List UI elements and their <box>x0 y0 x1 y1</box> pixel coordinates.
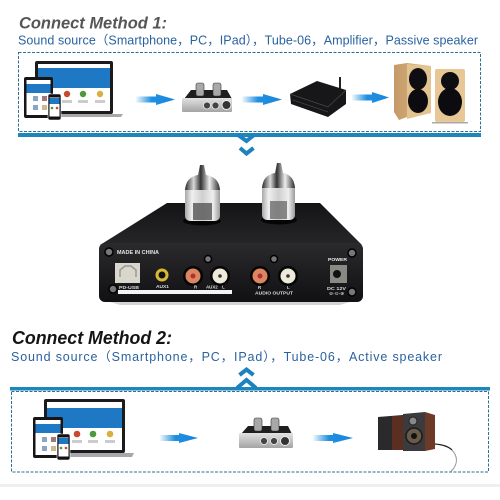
tube right <box>261 163 297 224</box>
port: audio output rca: L <box>287 285 290 290</box>
port: audio output rca: R <box>258 285 262 290</box>
device: passive speakers <box>394 63 468 124</box>
port: aux1 <box>156 268 170 289</box>
arrow 2 <box>242 94 282 105</box>
feet shadow <box>110 302 350 305</box>
screws <box>105 248 356 296</box>
devices: laptop tablet phone 1 <box>24 61 123 120</box>
device: tube preamp small 2 <box>239 418 293 448</box>
port: aux2 rca <box>183 266 230 290</box>
white strip <box>118 290 232 294</box>
subtitle: method 2 chain: Sound source（Smartphone，PC，IPad），Tube-06，Active speaker <box>11 350 442 364</box>
device: active speakers <box>378 412 456 472</box>
divider bar method 1 <box>18 133 481 137</box>
divider bar method 2 <box>10 387 490 390</box>
port: usb: PD-USB <box>119 285 139 290</box>
port: aux2 rca: L <box>222 284 225 290</box>
port: aux2 rca: R <box>194 284 198 290</box>
arrow 4 <box>160 433 198 443</box>
icon: up chevrons <box>237 370 256 388</box>
label: made in china: MADE IN CHINA <box>117 250 159 256</box>
arrow 1 <box>136 94 175 105</box>
title: connect method 1: Connect Method 1: <box>19 14 167 32</box>
port: audio output rca <box>250 266 298 296</box>
tube left <box>183 165 221 226</box>
device: amplifier <box>290 77 346 117</box>
chassis top <box>100 203 362 245</box>
title: connect method 2: Connect Method 2: <box>12 328 172 348</box>
port: usb <box>115 263 140 290</box>
bottom grey strip <box>0 484 500 487</box>
device: tube preamp small 1 <box>182 83 232 112</box>
port: power: POWER <box>328 257 348 263</box>
devices: laptop tablet phone 2 <box>33 399 134 460</box>
panel: method 2 dashed box <box>12 392 488 472</box>
subtitle: method 1 chain: Sound source（Smartphone，PC，IPad），Tube-06，Amplifier，Passive speaker <box>18 34 478 48</box>
port: audio output rca: AUDIO OUTPUT <box>255 290 293 296</box>
port: power <box>327 257 348 296</box>
port: aux1: AUX1 <box>156 284 170 289</box>
panel: method 1 dashed box <box>18 52 480 132</box>
icon: down chevrons <box>238 135 254 154</box>
port: power: DC 12V <box>327 286 347 292</box>
port: power: ⊖-⊙-⊕ <box>329 291 344 296</box>
product: tube preamp back view <box>99 163 363 305</box>
arrow 3 <box>352 92 389 103</box>
arrow 5 <box>313 433 353 443</box>
port: aux2 rca: AUX2 <box>206 284 218 290</box>
chassis front panel <box>99 243 363 302</box>
